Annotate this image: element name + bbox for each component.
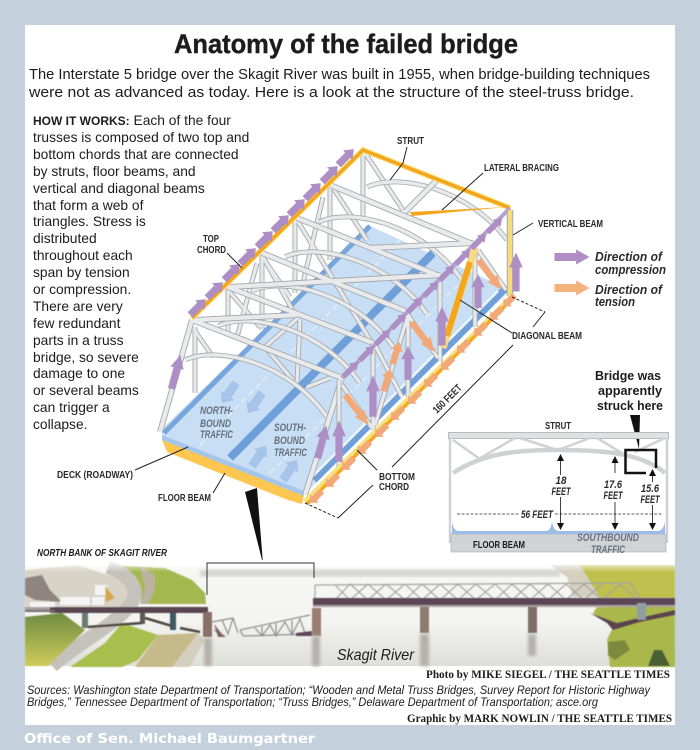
bridge deck (162, 226, 510, 504)
top and bottom chords (192, 150, 512, 504)
photo credit: Photo by MIKE SIEGEL / THE SEATTLE TIMES (426, 669, 670, 681)
diagram labels: BOTTOM (379, 471, 415, 483)
truss bridge diagram (135, 144, 545, 518)
how it works text: bridge, so severe (33, 350, 139, 365)
traffic labels: TRAFFIC (200, 429, 234, 441)
traffic labels: BOUND (274, 435, 305, 447)
diagram labels: LATERAL BRACING (484, 162, 559, 174)
reflections (204, 634, 536, 666)
struck box (626, 450, 656, 473)
strut label: STRUT (545, 420, 571, 432)
top fade (25, 560, 675, 572)
traffic labels: BOUND (200, 418, 231, 430)
intro text: The Interstate 5 bridge over the Skagit River was built in 1955, when bridge-building techniques (29, 67, 650, 83)
sources (27, 684, 651, 709)
160 feet dimension line (305, 297, 545, 518)
how it works text: or several beams (33, 383, 139, 398)
how it works text: that form a web of (33, 198, 144, 213)
how it works text: or compression. (33, 282, 131, 297)
how it works text: parts in a truss (33, 333, 124, 348)
traffic labels: SOUTH- (274, 422, 306, 434)
photo of collapsed bridge (25, 560, 675, 667)
traffic labels (200, 405, 308, 459)
floor beam: SOUTHBOUND (577, 532, 639, 544)
56 feet dimension: 56 FEET (521, 509, 554, 521)
strut frame (448, 432, 668, 543)
intro text (28, 67, 650, 101)
tension arrows (306, 256, 519, 507)
footer: Office of Sen. Michael Baumgartner (24, 731, 315, 747)
diagram labels: CHORD (379, 481, 409, 493)
legend: Direction of (595, 282, 664, 297)
how it works text (33, 113, 249, 432)
clearance arrows: 18 (556, 475, 567, 487)
legend (554, 249, 666, 309)
floor beam: FLOOR BEAM (473, 539, 525, 551)
how it works text: triangles. Stress is (33, 214, 146, 229)
floor beam (451, 521, 666, 556)
clearance arrows (552, 454, 660, 530)
far truss and arches (185, 153, 507, 417)
traffic labels: TRAFFIC (274, 447, 308, 459)
how it works text: distributed (33, 231, 97, 246)
traffic labels: NORTH- (200, 405, 233, 417)
leader lines (135, 147, 533, 493)
struts and near truss (160, 180, 506, 495)
how it works text: throughout each (33, 248, 133, 263)
how it works text: bottom chords that are connected (33, 147, 239, 162)
traffic arrows (215, 378, 304, 485)
legend: compression (595, 262, 666, 277)
sources: Bridges,” Tennessee Department of Transportation; “Truss Bridges,” Delaware Department of Transportation; asce.org (27, 696, 599, 709)
callout: struck here: Bridge was (595, 369, 661, 383)
river label: Skagit River (337, 647, 415, 664)
inset: bridge cross-section (448, 420, 668, 556)
right bridge span (312, 583, 675, 636)
callout: struck here: apparently (598, 384, 662, 398)
diagram labels: CHORD (197, 244, 226, 256)
how it works text: can trigger a (33, 400, 110, 415)
clearance arrows: 17.6 (604, 479, 623, 491)
intro text: were not as advanced as today. Here is a look at the structure of the steel-truss bridge. (28, 85, 634, 101)
clearance arrows: FEET (640, 494, 660, 506)
left bank (25, 565, 212, 667)
legend: Direction of (595, 249, 664, 264)
clearance arrows: 15.6 (641, 483, 660, 495)
north bank label: NORTH BANK OF SKAGIT RIVER (37, 548, 168, 559)
diagram labels: FLOOR BEAM (158, 492, 211, 504)
graphic credit: Graphic by MARK NOWLIN / THE SEATTLE TIMES (407, 713, 672, 725)
river and sky (25, 566, 675, 666)
clearance arrows: FEET (604, 490, 623, 502)
how it works text: by struts, floor beams, and (33, 164, 196, 179)
diagram labels: VERTICAL BEAM (538, 218, 603, 230)
callout: struck here (595, 369, 663, 449)
diagram labels: STRUT (397, 135, 424, 147)
haze band (200, 569, 560, 577)
right bank (550, 565, 675, 667)
how it works text: collapse. (33, 417, 87, 432)
160 feet dimension line: 160 FEET (431, 382, 465, 416)
how it works text: vertical and diagonal beams (33, 181, 205, 196)
clearance arrows: FEET (552, 486, 571, 498)
how it works text: span by tension (33, 265, 130, 280)
diagram labels (57, 135, 603, 504)
title: Anatomy of the failed bridge (174, 29, 518, 59)
diagram labels: DIAGONAL BEAM (512, 330, 582, 342)
callout: struck here: struck here (597, 399, 663, 413)
floor beam: TRAFFIC (591, 544, 626, 556)
how it works text: HOW IT WORKS: Each of the four (33, 113, 231, 128)
bracket (207, 563, 314, 595)
pointer to photo (245, 488, 263, 564)
sources: Sources: Washington state Department of Transportation; “Wooden and Metal Truss Bridges, Survey Report for Historic Highway (27, 684, 651, 697)
how it works text: There are very (33, 299, 123, 314)
collapsed span (212, 615, 312, 637)
diagram labels: TOP (203, 233, 219, 245)
how it works text: trusses is composed of two top and (33, 130, 249, 145)
diagram labels: DECK (ROADWAY) (57, 469, 133, 481)
legend: tension (595, 294, 635, 309)
compression arrows (165, 144, 523, 462)
how it works text: damage to one (33, 366, 125, 381)
how it works text: few redundant (33, 316, 121, 331)
